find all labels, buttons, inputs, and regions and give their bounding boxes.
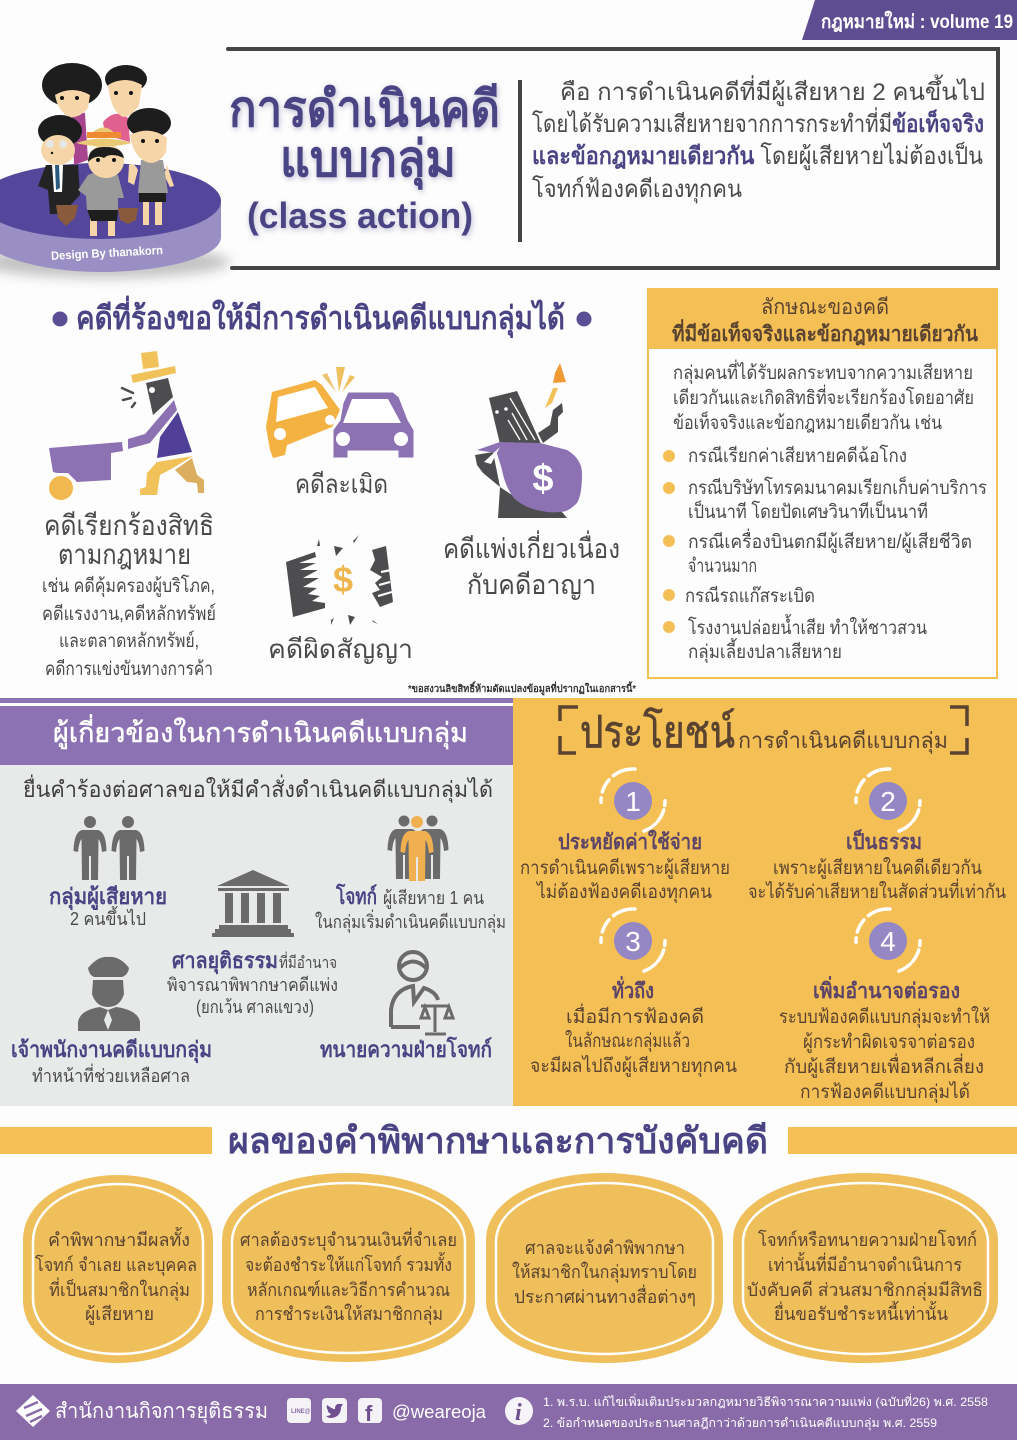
- benefit 4: กับผู้เสียหายเพื่อหลีกเลี่ยง: [784, 1053, 984, 1078]
- oval: court notifies members: ศาลจะแจ้งคำพิพากษา: [525, 1238, 685, 1258]
- label: plaintiff: ในกลุ่มเริ่มดำเนินคดีแบบกลุ่ม: [315, 909, 506, 933]
- oval: court must specify payment: จะต้องชำระให้แก่โจทก์ รวมทั้ง: [245, 1252, 452, 1275]
- references: 1. พ.ร.บ. แก้ไขเพิ่มเติมประมวลกฎหมายวิธีพิจารณาความแพ่ง (ฉบับที่26) พ.ศ. 2558: [543, 1393, 988, 1409]
- label: court of justice: พิจารณาพิพากษาคดีแพ่ง: [167, 975, 338, 995]
- icon: lawyer with scales: [391, 952, 453, 1034]
- volume tag: [802, 0, 1017, 40]
- label: rights claim cases: ตามกฎหมาย: [58, 539, 191, 570]
- main title: การดำเนินคดี: [229, 81, 500, 137]
- benefit 4: ผู้กระทำผิดเจรจาต่อรอง: [803, 1032, 975, 1053]
- bullet list: กรณีเครื่องบินตกมีผู้เสียหาย/ผู้เสียชีวิต: [688, 528, 972, 553]
- label: plaintiff lawyer: ทนายความฝ่ายโจทก์: [320, 1036, 492, 1062]
- oval: enforcement authority: บังคับคดี ส่วนสมาชิกกลุ่มมีสิทธิ: [747, 1280, 983, 1301]
- label: affected group: 2 คนขึ้นไป: [70, 906, 146, 929]
- illustration: group of people on a platform: Design By thanakorn: [51, 243, 163, 263]
- intro text: ข้อเท็จจริงและข้อกฎหมายเดียวกัน เช่น: [673, 410, 942, 434]
- panel: characteristics of the case: [647, 288, 998, 678]
- oval: court must specify payment: หลักเกณฑ์และวิธีการคำนวณ: [247, 1280, 450, 1300]
- panel header: ลักษณะของคดี: [761, 296, 889, 319]
- section heading: judgment and enforcement: ผลของคำพิพากษาและการบังคับคดี: [228, 1120, 768, 1161]
- oval: court notifies members: [486, 1173, 723, 1363]
- label: rights claim cases: [42, 510, 216, 680]
- panel: benefits: [513, 698, 1017, 1106]
- label: civil case related to criminal case: คดีแพ่งเกี่ยวเนื่อง: [443, 530, 620, 564]
- benefit 4: การฟ้องคดีแบบกลุ่มได้: [800, 1081, 970, 1104]
- icon: line: [287, 1398, 311, 1423]
- benefit 4: ระบบฟ้องคดีแบบกลุ่มจะทำให้: [779, 1006, 990, 1029]
- icon: torn contract: $: [333, 559, 353, 600]
- benefit 3: ในลักษณะกลุ่มแล้ว: [565, 1030, 690, 1053]
- label: civil case related to criminal case: [443, 530, 620, 600]
- panel header: [647, 288, 998, 348]
- illustration: group of people on a platform: [0, 63, 230, 278]
- benefit 1: ไม่ต้องฟ้องคดีเองทุกคน: [535, 881, 712, 904]
- icon: twitter: [322, 1398, 347, 1423]
- footer: [0, 1384, 1017, 1440]
- benefit 3: [530, 909, 737, 1078]
- benefit 3: จะมีผลไปถึงผู้เสียหายทุกคน: [530, 1055, 737, 1078]
- main title: (class action): [247, 195, 473, 236]
- definition text: โจทก์ฟ้องคดีเองทุกคน: [532, 175, 742, 204]
- copyright note: *ขอสงวนลิขสิทธิ์ห้ามดัดแปลงข้อมูลที่ปรากฏในเอกสารนี้*: [408, 681, 636, 696]
- label: plaintiff: โจทก์: [335, 883, 377, 909]
- bullet list: โรงงานปล่อยน้ำเสีย ทำให้ชาวสวน: [688, 614, 927, 639]
- oval: court notifies members: ให้สมาชิกในกลุ่มทราบโดย: [512, 1261, 697, 1283]
- icon: plaintiff among group: [388, 816, 448, 881]
- label: rights claim cases: คดีเรียกร้องสิทธิ: [44, 510, 214, 541]
- label: court of justice: ที่มีอำนาจ: [279, 951, 337, 972]
- main title: แบบกลุ่ม: [280, 131, 456, 190]
- definition text: และข้อกฎหมายเดียวกัน โดยผู้เสียหายไม่ต้องเป็น: [532, 141, 983, 171]
- oval: enforcement authority: ยื่นขอรับชำระหนี้เท่านั้น: [774, 1301, 948, 1324]
- intro text: เดียวกันและเกิดสิทธิที่จะเรียกร้องโดยอาศัย: [673, 384, 974, 409]
- person: man at back: [103, 65, 147, 142]
- person: woman at back: [42, 63, 102, 165]
- label: class action officer: เจ้าพนักงานคดีแบบกลุ่ม: [11, 1037, 212, 1064]
- references: 2. ข้อกำหนดของประธานศาลฎีกาว่าด้วยการดำเนินคดีแบบกลุ่ม พ.ศ. 2559: [543, 1416, 937, 1431]
- label: class action officer: ทำหน้าที่ช่วยเหลือศาล: [32, 1063, 190, 1086]
- person: man with suit and glasses: [38, 115, 82, 214]
- definition text: [532, 74, 985, 204]
- subheading: ยื่นคำร้องต่อศาลขอให้มีคำสั่งดำเนินคดีแบบกลุ่มได้: [23, 774, 493, 803]
- label: affected group: กลุ่มผู้เสียหาย: [49, 884, 167, 911]
- bullet list: กลุ่มเลี้ยงปลาเสียหาย: [688, 638, 842, 664]
- label: rights claim cases: คดีการแข่งขันทางการค้า: [45, 658, 213, 680]
- icon: facebook: [358, 1398, 382, 1426]
- benefit 2: 2: [880, 786, 896, 817]
- panel: people involved: [0, 698, 513, 1106]
- oval: enforcement authority: [733, 1173, 998, 1363]
- label: rights claim cases: และตลาดหลักทรัพย์,: [59, 630, 199, 652]
- bullet list: [663, 444, 987, 664]
- icon: car crash: [266, 367, 414, 458]
- oval: enforcement authority: เท่านั้นที่มีอำนาจดำเนินการ: [768, 1252, 962, 1275]
- icon: farmer with cart: [49, 351, 204, 500]
- bullet list: เป็นนาที โดยปัดเศษวินาทีเป็นนาที: [688, 499, 928, 523]
- title box frame: [228, 49, 998, 268]
- benefit 4: [779, 909, 990, 1104]
- footer: @weareoja: [392, 1402, 487, 1422]
- references: [543, 1393, 988, 1431]
- oval: enforcement authority: โจทก์หรือทนายความฝ่ายโจทก์: [758, 1229, 977, 1250]
- icon: thief with money bag: [475, 363, 582, 518]
- oval: who judgment binds: ผู้เสียหาย: [85, 1304, 154, 1325]
- panel header: ที่มีข้อเท็จจริงและข้อกฎหมายเดียวกัน: [672, 318, 979, 346]
- bullet list: จำนวนมาก: [688, 556, 757, 577]
- oval: court must specify payment: การชำระเงินให้สมาชิกกลุ่ม: [255, 1303, 443, 1325]
- benefit 1: 1: [625, 786, 641, 817]
- benefit 2: เป็นธรรม: [846, 828, 922, 854]
- oval: who judgment binds: โจทก์ จำเลย และบุคคล: [35, 1254, 197, 1276]
- intro text: กลุ่มคนที่ได้รับผลกระทบจากความเสียหาย: [673, 359, 973, 385]
- footer: สำนักงานกิจการยุติธรรม: [55, 1400, 268, 1424]
- oval: who judgment binds: ที่เป็นสมาชิกในกลุ่ม: [49, 1277, 190, 1301]
- benefit 4: เพิ่มอำนาจต่อรอง: [813, 975, 960, 1003]
- benefit 2: [748, 769, 1006, 903]
- panel heading: การดำเนินคดีแบบกลุ่ม: [738, 728, 948, 754]
- label: court of justice: [167, 948, 338, 1017]
- benefit 3: เมื่อมีการฟ้องคดี: [566, 1003, 704, 1028]
- bullet list: กรณีรถแก๊สระเบิด: [685, 585, 815, 607]
- benefit 4: 4: [880, 926, 896, 957]
- icon: thief with money bag: $: [532, 458, 554, 500]
- section heading: eligible cases: คดีที่ร้องขอให้มีการดำเนินคดีแบบกลุ่มได้: [76, 295, 565, 339]
- person: boy with straw hat: [56, 128, 138, 236]
- oval: court must specify payment: ศาลต้องระบุจำนวนเงินที่จำเลย: [240, 1227, 457, 1251]
- icon: court officer: [78, 957, 140, 1031]
- benefit 1: [520, 769, 730, 904]
- oval: who judgment binds: [23, 1175, 213, 1363]
- oval: court notifies members: ประกาศผ่านทางสื่อต่างๆ: [514, 1284, 696, 1307]
- section heading: judgment and enforcement: [0, 1120, 1017, 1161]
- label: court of justice: (ยกเว้น ศาลแขวง): [196, 997, 314, 1017]
- icon: courthouse: [212, 870, 294, 937]
- vertical divider: [518, 80, 522, 242]
- panel heading: [560, 707, 967, 757]
- benefit 3: ทั่วถึง: [612, 975, 654, 1003]
- icon: two people: [74, 816, 144, 880]
- icon: torn contract: [286, 535, 393, 625]
- icon: line: LINE@: [291, 1409, 311, 1415]
- label: plaintiff: [315, 883, 506, 933]
- benefit 1: ประหยัดค่าใช้จ่าย: [558, 829, 702, 854]
- label: affected group: [49, 884, 167, 929]
- benefit 2: เพราะผู้เสียหายในคดีเดียวกัน: [773, 857, 982, 879]
- icon: info: i: [515, 1400, 522, 1426]
- benefit 1: การดำเนินคดีเพราะผู้เสียหาย: [520, 857, 730, 879]
- label: class action officer: [11, 1037, 212, 1086]
- bullet list: กรณีเรียกค่าเสียหายคดีฉ้อโกง: [688, 444, 907, 467]
- panel heading band: ผู้เกี่ยวข้องในการดำเนินคดีแบบกลุ่ม: [53, 714, 468, 750]
- benefit 3: 3: [625, 926, 641, 957]
- oval: court must specify payment: [222, 1173, 475, 1362]
- definition text: คือ การดำเนินคดีที่มีผู้เสียหาย 2 คนขึ้นไป: [560, 74, 985, 107]
- panel heading: ประโยชน์: [580, 707, 735, 757]
- label: breach of contract: คดีผิดสัญญา: [268, 634, 413, 664]
- intro text: [673, 359, 974, 434]
- oval: who judgment binds: คำพิพากษามีผลทั้ง: [48, 1227, 190, 1250]
- main title: [229, 81, 500, 236]
- label: rights claim cases: เช่น คดีคุ้มครองผู้บริโภค,: [42, 574, 215, 598]
- definition text: โดยได้รับความเสียหายจากการกระทำที่มีข้อเท็จจริง: [532, 107, 984, 138]
- person: boy in grey tank top: [127, 108, 174, 225]
- panel heading band: [0, 706, 513, 765]
- label: tort case: คดีละเมิด: [295, 469, 388, 499]
- icon: agency logo: [16, 1395, 50, 1427]
- icon: info: [505, 1397, 533, 1426]
- label: plaintiff: ผู้เสียหาย 1 คน: [383, 888, 484, 909]
- label: rights claim cases: คดีแรงงาน,คดีหลักทรัพย์: [42, 603, 216, 625]
- label: civil case related to criminal case: กับคดีอาญา: [467, 570, 596, 600]
- icon: facebook: f: [365, 1401, 373, 1426]
- label: court of justice: ศาลยุติธรรม: [172, 948, 278, 975]
